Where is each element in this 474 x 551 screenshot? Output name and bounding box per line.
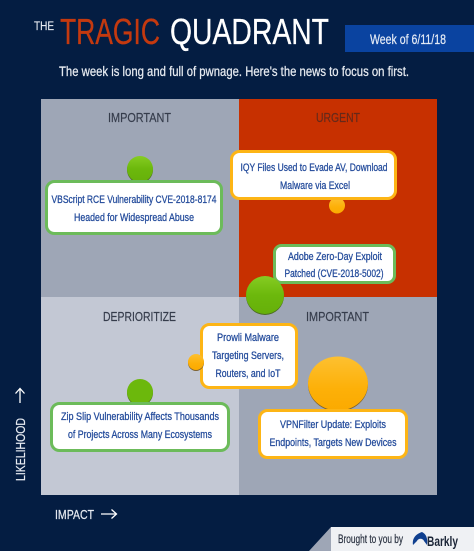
axis label: likelihood: LIKELIHOOD bbox=[14, 418, 28, 481]
card: Zip Slip bbox=[52, 404, 228, 450]
title: THE bbox=[34, 21, 54, 33]
quadrant: urgent bbox=[239, 99, 437, 297]
card: Adobe: Patched (CVE-2018-5002) bbox=[284, 268, 384, 280]
footer sponsor: Brought to you by bbox=[338, 534, 403, 546]
quadrant: important bottom right: IMPORTANT bbox=[306, 309, 369, 324]
card: Prowli bbox=[202, 324, 296, 388]
quadrant: deprioritize bbox=[41, 297, 239, 495]
card: VPNFilter: Endpoints, Targets New Devices bbox=[270, 437, 397, 449]
card: VPNFilter bbox=[260, 410, 406, 458]
card: IQY bbox=[232, 152, 396, 198]
footer sponsor: Barkly bbox=[427, 534, 458, 549]
marker: Prowli orange dot bbox=[188, 354, 204, 370]
subtitle: The week is long and full of pwnage. Here's the news to focus on first. bbox=[59, 64, 409, 79]
title: QUADRANT bbox=[170, 11, 329, 52]
title bbox=[34, 11, 329, 52]
title: TRAGIC bbox=[60, 11, 160, 52]
card: VBScript bbox=[46, 182, 222, 234]
icon: Barkly logo bbox=[413, 532, 427, 545]
quadrant: important top left bbox=[41, 99, 239, 297]
quadrant: important bottom right bbox=[239, 297, 437, 495]
marker: IQY orange dot bbox=[329, 198, 345, 214]
marker: Zip Slip green dot bbox=[127, 379, 153, 405]
card: VBScript: VBScript RCE Vulnerability CVE-2018-8174 bbox=[52, 194, 216, 206]
marker: VBScript green dot bbox=[127, 156, 153, 182]
marker: VPNFilter orange dot bbox=[308, 356, 368, 410]
card: Zip Slip: of Projects Across Many Ecosystems bbox=[68, 429, 212, 441]
card: Prowli: Targeting Servers, bbox=[212, 350, 284, 362]
card: Zip Slip: Zip Slip Vulnerability Affects Thousands bbox=[61, 411, 219, 423]
axis label: impact: IMPACT bbox=[55, 508, 94, 522]
quadrant: important top left: IMPORTANT bbox=[108, 110, 171, 125]
card: Prowli: Routers, and IoT bbox=[216, 368, 281, 380]
card: IQY: IQY Files Used to Evade AV, Download bbox=[240, 162, 388, 174]
quadrant: urgent: URGENT bbox=[316, 110, 360, 125]
card: IQY: Malware via Excel bbox=[280, 180, 350, 192]
card: Adobe bbox=[274, 246, 394, 282]
date badge: Week of 6/11/18 bbox=[370, 32, 446, 47]
card: VBScript: Headed for Widespread Abuse bbox=[74, 212, 194, 224]
footer sponsor bbox=[309, 527, 474, 551]
card: VPNFilter: VPNFilter Update: Exploits bbox=[280, 419, 386, 431]
card: Prowli: Prowli Malware bbox=[217, 332, 279, 344]
card: Adobe: Adobe Zero-Day Exploit bbox=[288, 251, 382, 263]
quadrant: deprioritize: DEPRIORITIZE bbox=[103, 309, 176, 324]
marker: Adobe green dot bbox=[246, 276, 284, 314]
date badge bbox=[345, 25, 474, 52]
